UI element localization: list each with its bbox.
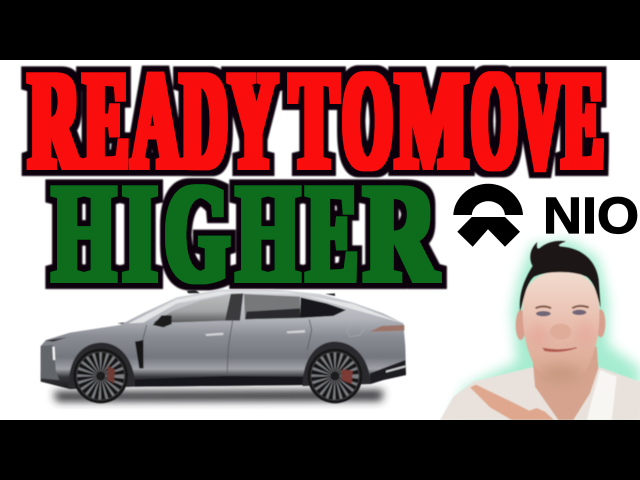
white background panel: [0, 60, 640, 420]
front wheel: [73, 349, 128, 403]
front vent: [135, 340, 143, 368]
taillight: [370, 325, 404, 332]
hair: [520, 241, 601, 312]
hand pointing: [470, 385, 554, 420]
car: [41, 289, 406, 403]
car body: [41, 289, 406, 389]
face: [523, 271, 599, 381]
heading: READY TOMOVE: V: [519, 43, 561, 198]
heading: READY TOMOVE: [29, 43, 603, 198]
heading: READY TOMOVE: T: [290, 43, 338, 198]
heading: READY TOMOVE: D: [181, 43, 227, 198]
shirt: [440, 367, 640, 420]
roof rails: [117, 289, 335, 324]
ears: [516, 310, 526, 340]
neck: [532, 347, 598, 420]
person: [440, 241, 640, 420]
eyes: [536, 311, 551, 316]
heading: READY TOMOVE: M: [396, 43, 468, 198]
heading: READY TOMOVE: O: [343, 43, 392, 198]
door seams and handles: [143, 319, 367, 383]
heading: READY TOMOVE: A: [132, 43, 179, 198]
heading: READY TOMOVE: E: [84, 43, 128, 198]
wheel arches: [68, 342, 371, 388]
heading: HIGHER: E: [307, 156, 357, 311]
eyebrows: [535, 305, 589, 309]
nose: [550, 324, 571, 340]
rear wheel: [308, 349, 362, 403]
side windows: [153, 294, 230, 322]
mouth: [543, 348, 577, 352]
logo wordmark: NIO: [543, 187, 639, 244]
headlight panel: [41, 345, 59, 380]
heading: READY TOMOVE: R: [29, 43, 81, 198]
person glow: [450, 240, 640, 420]
cheeks: [528, 322, 594, 347]
heading: HIGHER: G: [165, 156, 229, 311]
mirror: [153, 315, 172, 327]
heading: HIGHER: R: [364, 156, 438, 311]
heading: HIGHER: I: [123, 156, 157, 311]
heading: HIGHER: H: [53, 156, 115, 311]
rear bumper: [370, 360, 406, 384]
sill: [135, 376, 307, 387]
bottom bar: [0, 420, 640, 480]
heading: READY TOMOVE: O: [472, 43, 517, 198]
roof highlight: [128, 291, 403, 323]
heading: HIGHER: H: [237, 156, 299, 311]
heading: READY TOMOVE: Y: [229, 43, 277, 198]
stubble: [541, 364, 581, 383]
car shadow: [53, 390, 383, 401]
icon: NIO logo: [453, 184, 523, 247]
heading: HIGHER: [53, 156, 438, 311]
